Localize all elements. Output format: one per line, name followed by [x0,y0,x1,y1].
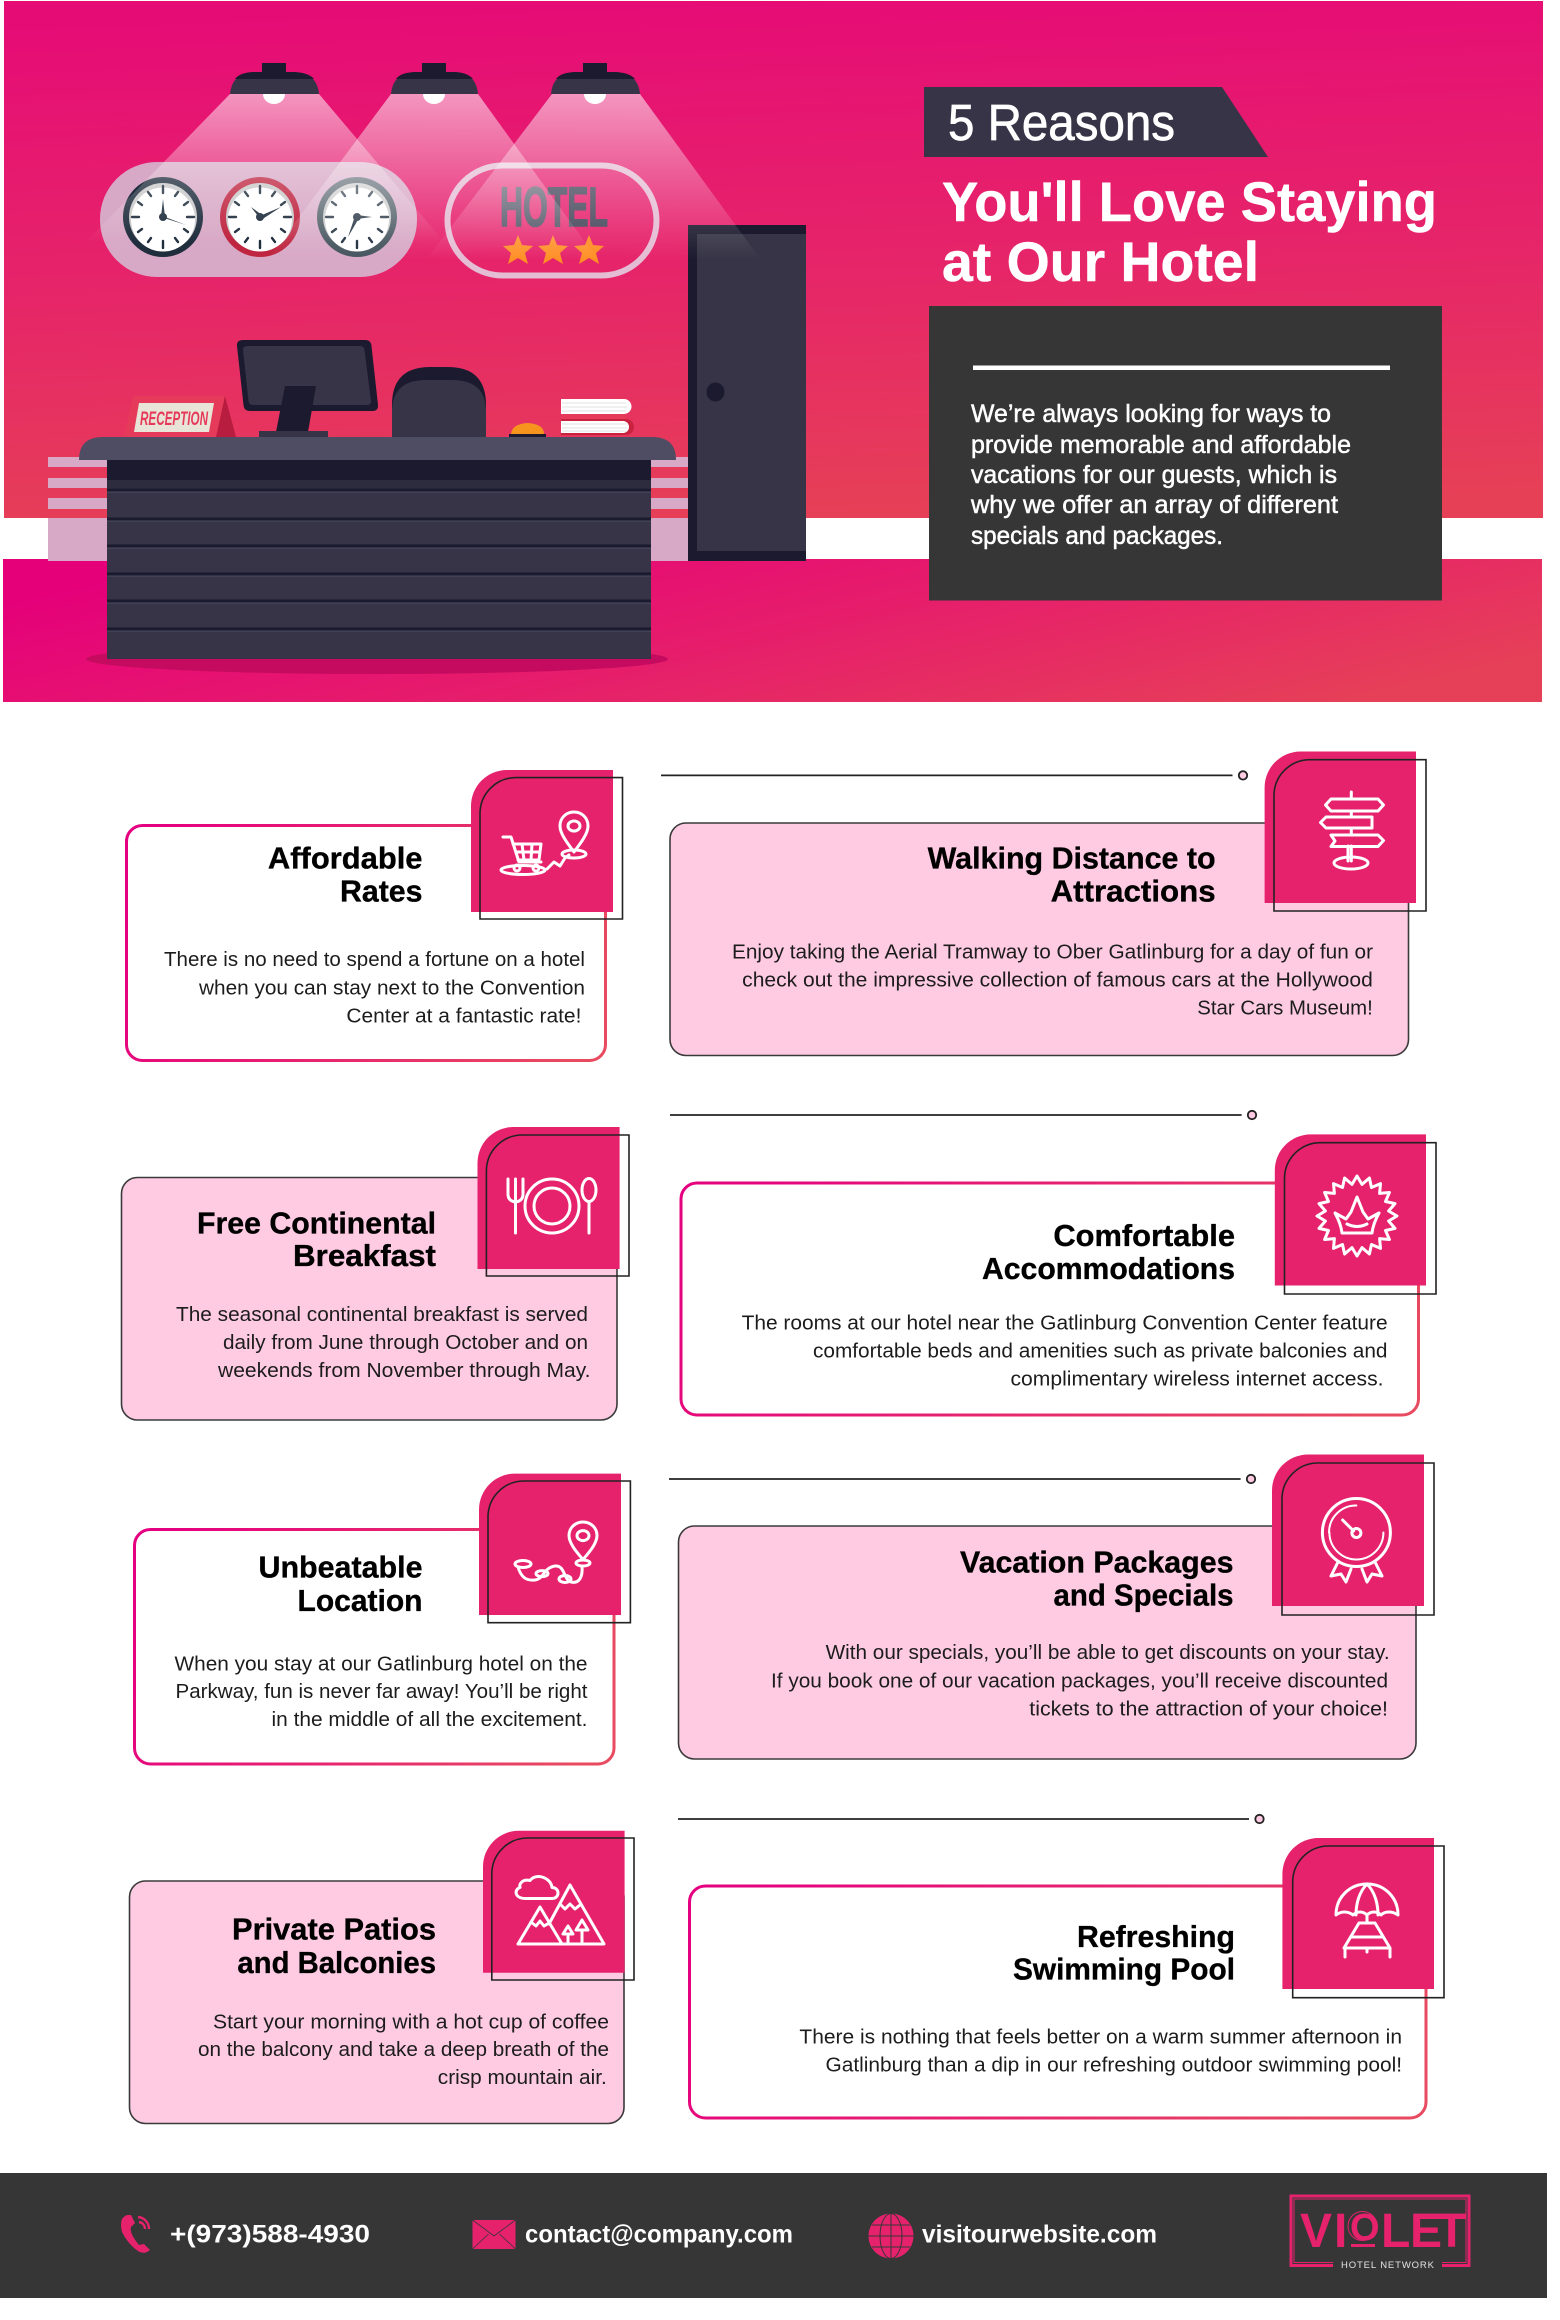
title block [924,87,1442,600]
body text: check out the impressive collection of famous cars at the Hollywood [742,970,1373,992]
contact: phone [121,2215,370,2253]
body text: Start your morning with a hot cup of coffee [213,2012,609,2034]
heading [268,840,422,909]
heading: Free Continental [197,1206,436,1241]
heading [982,1218,1235,1286]
heading: Attractions [1051,874,1216,909]
icon: signpost [1265,752,1426,911]
heading: Comfortable [1053,1218,1235,1253]
card: Unbeatable Location [134,1474,630,1764]
card: Refreshing Swimming Pool [678,1815,1444,2118]
heading: Rates [340,874,422,909]
hero floor band [3,559,1542,702]
body text [198,2012,609,2089]
card: Private Patios and Balconies [130,1831,634,2124]
body text: complimentary wireless internet access. [1010,1368,1384,1390]
body text: on the balcony and take a deep breath of the [198,2039,609,2061]
logo: Violet Hotel Network: V [1300,2205,1332,2258]
intro text: vacations for our guests, which is [971,461,1337,489]
hero illustration: hotel reception [3,1,1543,702]
body text: Parkway, fun is never far away! You’ll be right [176,1681,588,1703]
desk shadow [86,644,668,674]
body text: Enjoy taking the Aerial Tramway to Ober Gatlinburg for a day of fun or [732,942,1373,964]
body text [742,1312,1388,1390]
heading [1013,1919,1235,1986]
heading: Vacation Packages [960,1545,1234,1580]
stack of books [561,399,634,435]
icon: award stopwatch [1272,1454,1434,1615]
logo: Violet Hotel Network: T [1437,2205,1466,2258]
body text: Star Cars Museum! [1197,998,1373,1020]
contact: website [868,2214,1157,2258]
door [688,225,806,561]
body text [771,1642,1390,1720]
body text: in the middle of all the excitement. [272,1709,588,1731]
intro panel [929,306,1442,600]
title tag: 5 Reasons [924,87,1268,157]
heading [928,841,1216,909]
heading: Refreshing [1077,1919,1235,1954]
icon: beach umbrella and lounger [1282,1838,1444,1998]
logo: Violet Hotel Network: E [1410,2205,1442,2258]
heading [197,1206,436,1273]
body text: There is nothing that feels better on a warm summer afternoon in [799,2027,1402,2049]
card: Free Continental Breakfast [122,1127,629,1420]
heading: Walking Distance to [928,841,1216,876]
icon: crown badge [1275,1134,1436,1294]
clock three [317,177,397,257]
heading [960,1545,1234,1613]
ceiling lamps with light cones [85,63,761,260]
body text: daily from June through October and on [223,1332,588,1354]
body text: The seasonal continental breakfast is served [176,1304,588,1326]
main heading [942,170,1437,293]
heading: Private Patios [232,1912,436,1947]
body text: If you book one of our vacation packages, you’ll receive discounted [771,1670,1388,1692]
card: Affordable Rates [126,770,622,1060]
footer bar [0,2173,1547,2298]
wall stripes beside the desk [48,457,688,561]
title tag: 5 Reasons: 5 Reasons [948,94,1175,151]
intro text: specials and packages. [971,522,1223,550]
card: Walking Distance to Attractions [661,752,1426,1056]
body text [176,1304,590,1382]
lamp two [391,63,478,104]
desk chair back [392,367,486,437]
logo: Violet Hotel Network: O [1350,2207,1380,2249]
body text [732,942,1373,1020]
icon: plate and cutlery [478,1127,629,1276]
body text [174,1653,588,1731]
contact: website: visitourwebsite.com [922,2221,1157,2249]
service bell [509,423,546,437]
icon: mountains and cloud [483,1831,634,1980]
icon: route with location pin [479,1474,630,1623]
body text: The rooms at our hotel near the Gatlinburg Convention Center feature [742,1312,1388,1334]
hero wall background [4,1,1543,518]
body text: Gatlinburg than a dip in our refreshing outdoor swimming pool! [826,2054,1402,2076]
body text: There is no need to spend a fortune on a hotel [164,949,585,971]
body text [799,2027,1402,2076]
logo: Violet Hotel Network [1291,2196,1469,2271]
clock two [220,177,300,257]
body text [164,949,585,1027]
body text: comfortable beds and amenities such as private balconies and [813,1340,1388,1362]
contact: phone: +(973)588-4930 [170,2221,370,2249]
hotel sign with three stars: HOTEL [500,175,608,238]
icon: shopping cart and map pin [471,770,622,919]
logo: Violet Hotel Network: HOTEL NETWORK [1341,2260,1435,2271]
heading: and Balconies [237,1945,436,1980]
intro text: why we offer an array of different [970,491,1338,519]
heading [258,1550,422,1618]
heading [232,1912,436,1980]
heading: Breakfast [293,1238,436,1273]
body text: when you can stay next to the Convention [198,977,585,999]
reception desk sign [124,396,236,437]
heading: Swimming Pool [1013,1951,1235,1986]
body text: weekends from November through May. [217,1360,591,1382]
clock one [123,177,203,257]
heading: Accommodations [982,1251,1235,1286]
body text: tickets to the attraction of your choice! [1029,1698,1388,1720]
lamp three [551,63,640,104]
reception desk sign: RECEPTION [140,409,209,430]
intro text [970,400,1351,550]
clock panel with three wall clocks [100,162,417,277]
main heading: You'll Love Staying [942,170,1437,233]
hotel sign with three stars [448,166,656,276]
reception desk [79,437,676,659]
computer monitor [237,340,378,437]
heading: Location [298,1583,422,1618]
heading: and Specials [1054,1578,1234,1613]
intro text: We’re always looking for ways to [971,400,1331,428]
body text: With our specials, you’ll be able to get discounts on your stay. [826,1642,1390,1664]
lamp one [230,63,319,104]
body text: Center at a fantastic rate! [346,1005,581,1027]
card: Comfortable Accommodations [670,1111,1436,1415]
heading: Affordable [268,840,422,876]
logo: Violet Hotel Network: I [1334,2205,1347,2258]
heading: Unbeatable [258,1550,422,1585]
card: Vacation Packages and Specials [669,1454,1434,1759]
main heading: at Our Hotel [942,230,1259,293]
logo: Violet Hotel Network: L [1381,2205,1410,2258]
contact: email: contact@company.com [525,2220,793,2248]
intro text: provide memorable and affordable [971,431,1351,459]
body text: When you stay at our Gatlinburg hotel on the [174,1653,588,1675]
body text: crisp mountain air. [438,2067,607,2089]
